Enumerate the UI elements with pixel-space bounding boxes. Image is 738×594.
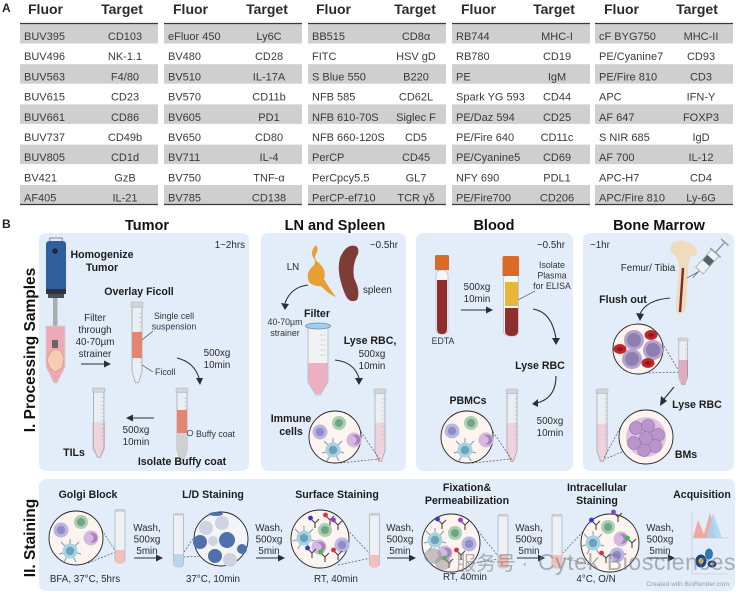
table column 4: Target	[533, 1, 575, 17]
arrow	[256, 554, 285, 562]
table column 4: RB744	[456, 31, 490, 43]
table column 3	[308, 1, 446, 204]
table column 4: CD206	[540, 192, 574, 204]
row stripes	[20, 24, 158, 204]
table column 2: BV510	[168, 71, 201, 83]
arrow: to lyse	[660, 387, 674, 406]
label: wash: 5min	[136, 546, 158, 557]
step: Golgi Block: Golgi Block	[59, 489, 118, 501]
table column 5: Target	[676, 1, 718, 17]
label: wash: Wash,	[646, 523, 674, 534]
label: wash: 500xg	[387, 534, 413, 546]
table column 3: PerCP	[312, 152, 344, 164]
row label: II. Staining: II. Staining	[22, 499, 39, 577]
table column 4: CD11c	[541, 132, 574, 144]
table column 5: APC/Fire 810	[599, 192, 665, 204]
arrow: flush	[636, 298, 670, 321]
table column 3: PerCP-ef710	[312, 192, 376, 204]
arrow: to PBMC tube	[532, 376, 556, 407]
arrow	[134, 554, 163, 562]
table column 3: NFB 660-120S	[312, 132, 385, 144]
table column 4: NFY 690	[456, 172, 499, 184]
chart: histogram	[692, 512, 728, 538]
step: Intracellular Staining	[552, 482, 639, 585]
tube: plasma separation	[502, 256, 519, 336]
label: spin: 500xg	[537, 416, 563, 427]
table column 2: BV650	[168, 132, 201, 144]
icon: homogenizer	[46, 238, 66, 383]
table column 2: IL-4	[260, 152, 278, 164]
step: L/D Staining: L/D Staining	[182, 489, 244, 501]
watermark icon	[424, 548, 451, 570]
table column 4: PE/Fire700	[456, 192, 511, 204]
table column 3: FITC	[312, 51, 336, 63]
table column 3: Siglec F	[396, 112, 436, 124]
table column 4: IgM	[548, 71, 566, 83]
step: Fixation and Permeabilization: RT, 40min	[443, 572, 487, 583]
table column 3: NFB 610-70S	[312, 112, 379, 124]
table column 5: IgD	[692, 132, 710, 144]
table column 2: CD28	[255, 51, 283, 63]
label: femur/tibia: Femur/ Tibia	[621, 263, 676, 274]
arrow: spin	[461, 306, 493, 314]
table column 5: AF 647	[599, 112, 634, 124]
label: wash: 5min	[518, 546, 540, 557]
label: PBMCs: PBMCs	[449, 395, 487, 407]
arrow	[387, 554, 416, 562]
table column 1: BUV661	[24, 112, 65, 124]
table column 5: IL-12	[688, 152, 714, 164]
step: Acquisition: Acquisition	[673, 489, 731, 501]
label: Lyse RBC: Lyse RBC	[515, 360, 565, 372]
table column 2: Target	[246, 1, 288, 17]
table column 1: CD1d	[111, 152, 139, 164]
magnified BMs	[604, 410, 673, 464]
icon: syringe	[687, 238, 730, 283]
step: Fixation and Permeabilization	[422, 482, 509, 583]
table column 4: MHC-I	[541, 31, 573, 43]
label: filter step: strainer	[79, 349, 112, 360]
magnified cells	[441, 411, 512, 463]
label: Immune cells: cells	[279, 426, 303, 438]
label: spin: 500xg	[359, 349, 385, 360]
step: Golgi Block	[49, 489, 125, 585]
label: single cell suspension: suspension	[152, 322, 196, 332]
table column 3: TCR γδ	[397, 192, 435, 204]
panel: Blood	[416, 218, 573, 471]
table column 1: IL-21	[112, 192, 138, 204]
table column 2: CD138	[252, 192, 286, 204]
tube: EDTA blood	[435, 255, 449, 334]
table column 5: CD93	[687, 51, 715, 63]
arrow: to TILs	[126, 414, 154, 422]
table column 4: RB780	[456, 51, 490, 63]
label: buffy coat: Buffy coat	[196, 429, 236, 439]
table column 1	[20, 1, 158, 204]
table column 3: Fluor	[316, 1, 352, 17]
table column 2: BV750	[168, 172, 201, 184]
label: BMs: BMs	[675, 449, 697, 461]
table column 4: Fluor	[461, 1, 497, 17]
label: wash: 5min	[258, 546, 280, 557]
label: spin 500xg: 500xg	[204, 348, 230, 359]
table column 4: Spark YG 593	[456, 92, 525, 104]
magnified marrow cells	[613, 324, 683, 376]
step: Fixation and Permeabilization: Fixation&	[443, 482, 491, 494]
tube: BMs	[596, 389, 608, 462]
tube: PBMCs	[506, 389, 518, 462]
label: isolate plasma: for ELISA	[533, 281, 571, 291]
table column 2: PD1	[258, 112, 280, 124]
step: Intracellular Staining: 4°C, O/N	[576, 574, 616, 585]
tube: ficoll overlay	[131, 302, 143, 383]
label: isolate plasma: Plasma	[537, 270, 567, 280]
table column 1: CD23	[111, 92, 139, 104]
row label: I. Processing Samples: I. Processing Samples	[22, 268, 39, 432]
label: spin: 10min	[537, 428, 563, 439]
table column 3: CD8α	[402, 31, 431, 43]
arrow	[517, 554, 545, 562]
panel: Bone Marrow	[583, 218, 734, 471]
tube: marrow	[678, 338, 688, 385]
arrow: lyse to tube	[335, 360, 363, 385]
label: filter step: Filter	[84, 313, 106, 324]
table column 3: PerCpcy5.5	[312, 172, 369, 184]
tube: immune cells	[374, 389, 386, 462]
section label A: A	[2, 1, 11, 15]
table column 5	[595, 1, 733, 204]
table column 1: CD86	[111, 112, 139, 124]
label: spleen: spleen	[363, 285, 392, 296]
table column 2: Fluor	[173, 1, 209, 17]
label: time: 1~2hrs	[215, 240, 245, 251]
table column 4: CD44	[543, 92, 571, 104]
table column 5: MHC-II	[684, 31, 718, 43]
panel: LN and Spleen	[261, 218, 406, 471]
label: Flush out: Flush out	[599, 294, 647, 306]
table column 4: PE	[456, 71, 471, 83]
label: single cell suspension: Single cell	[154, 311, 194, 321]
table column 2: CD80	[255, 132, 283, 144]
label: filter step: through	[78, 325, 112, 336]
panel: Tumor	[39, 218, 249, 471]
step: Surface Staining	[291, 489, 380, 585]
label: wash: 500xg	[516, 534, 542, 546]
table column 1: AF405	[24, 192, 56, 204]
step: Surface Staining: Surface Staining	[295, 489, 379, 501]
label: Filter: Filter	[304, 308, 330, 320]
arrow: node to filter	[281, 285, 308, 310]
table column 1: NK-1.1	[108, 51, 142, 63]
step: Golgi Block: BFA, 37°C, 5hrs	[50, 574, 120, 585]
table column 1: BUV563	[24, 71, 65, 83]
panel: LN and Spleen: LN and Spleen	[285, 218, 385, 234]
label: wash: 500xg	[647, 534, 673, 546]
table column 2: TNF-α	[253, 172, 285, 184]
label: strainer size: 40-70µm	[268, 317, 302, 327]
table column 2: CD11b	[252, 92, 286, 104]
table column 3: CD45	[402, 152, 430, 164]
label: wash: Wash,	[255, 523, 283, 534]
label: LN: LN	[287, 262, 299, 273]
table column 5: S NIR 685	[599, 132, 650, 144]
label: spin 500xg: 10min	[204, 360, 230, 371]
watermark text: Cytek Biosciences	[538, 549, 736, 575]
label: Overlay Ficoll: Overlay Ficoll	[104, 286, 174, 298]
arrow: filter to ficoll	[81, 360, 111, 368]
credit: Created with BioRender.com	[646, 581, 729, 588]
table column 2: Ly6C	[256, 31, 282, 43]
table column 3: CD62L	[399, 92, 433, 104]
label: filter step: 40-70µm	[76, 337, 114, 348]
watermark text: 服务号 ·	[456, 553, 528, 575]
table column 5: IFN-Y	[687, 92, 716, 104]
table column 2: eFluor 450	[168, 31, 221, 43]
table column 3: Target	[394, 1, 436, 17]
table column 2: IL-17A	[253, 71, 286, 83]
table column 2: BV711	[168, 152, 200, 164]
table column 4: PE/Fire 640	[456, 132, 514, 144]
tube: TILs	[92, 388, 105, 458]
table column 5: AF 700	[599, 152, 634, 164]
label: wash: Wash,	[133, 523, 161, 534]
table column 5: cF BYG750	[599, 31, 656, 43]
table column 2	[164, 1, 302, 204]
label: TILs: TILs	[63, 447, 85, 459]
step: L/D Staining: 37°C, 10min	[186, 574, 240, 585]
magnified cells	[309, 411, 380, 463]
table column 1: BUV496	[24, 51, 65, 63]
table column 2: BV570	[168, 92, 201, 104]
label: EDTA: EDTA	[432, 336, 455, 346]
table column 5: Ly-6G	[686, 192, 716, 204]
label: Immune cells: Immune	[271, 413, 311, 425]
table column 2: BV785	[168, 192, 201, 204]
step: Surface Staining: RT, 40min	[314, 574, 358, 585]
table column 3: B220	[403, 71, 429, 83]
table column 3: GL7	[406, 172, 426, 184]
table column 4: PDL1	[543, 172, 571, 184]
table column 3: NFB 585	[312, 92, 355, 104]
label: spin: 10min	[359, 361, 385, 372]
table column 3: BB515	[312, 31, 345, 43]
table column 5: PE/Fire 810	[599, 71, 657, 83]
label: wash: 5min	[649, 546, 671, 557]
panel: Bone Marrow: Bone Marrow	[613, 218, 706, 234]
label: spin: 10min	[464, 294, 490, 305]
label: time: ~0.5hr	[537, 240, 566, 251]
label: time: ~1hr	[590, 240, 611, 251]
arrow: to lyse	[533, 309, 560, 345]
step: L/D Staining	[174, 489, 248, 585]
label: Homogenize Tumor: Tumor	[86, 262, 118, 274]
label: Lyse RBC: Lyse RBC	[672, 399, 722, 411]
table column 5: APC	[599, 92, 622, 104]
icon: lymph node	[308, 245, 336, 297]
tube: filter tube	[306, 323, 330, 395]
table column 1: BUV615	[24, 92, 65, 104]
label: wash: 5min	[389, 546, 411, 557]
table column 4: CD19	[543, 51, 571, 63]
step: Acquisition	[673, 489, 731, 574]
step: Intracellular Staining: Intracellular	[567, 482, 627, 494]
panel: Staining	[39, 479, 736, 591]
table column 5: CD3	[690, 71, 712, 83]
table column 5: CD4	[690, 172, 712, 184]
table column 1: GzB	[114, 172, 136, 184]
icon: femur	[670, 240, 697, 314]
label: wash: 500xg	[134, 534, 160, 546]
label: wash: 500xg	[256, 534, 282, 546]
step: Fixation and Permeabilization: Permeabilization	[425, 495, 509, 507]
chart: density plot	[692, 538, 728, 574]
table column 5: Fluor	[604, 1, 640, 17]
icon: spleen	[339, 246, 358, 301]
table column 3: CD5	[405, 132, 427, 144]
table column 1: BUV805	[24, 152, 65, 164]
table column 1: CD103	[108, 31, 142, 43]
table column 1: F4/80	[111, 71, 139, 83]
label: Lyse RBC: Lyse RBC,	[344, 335, 396, 347]
table column 2: BV480	[168, 51, 201, 63]
table column 3: S Blue 550	[312, 71, 366, 83]
label: spin 500xg: 10min	[123, 437, 149, 448]
table column 5: FOXP3	[683, 112, 719, 124]
table column 1: CD49b	[108, 132, 142, 144]
table column 5: APC-H7	[599, 172, 639, 184]
label: strainer size: strainer	[270, 328, 300, 338]
table column 4: CD25	[543, 112, 571, 124]
table column 1: Fluor	[28, 1, 64, 17]
table column 4	[452, 1, 590, 204]
table column 4: PE/Cyanine5	[456, 152, 520, 164]
panel: Blood: Blood	[473, 218, 515, 234]
arrow	[647, 554, 675, 562]
label: Isolate Buffy coat: Isolate Buffy coat	[138, 456, 227, 468]
table column 1: BUV395	[24, 31, 65, 43]
panel: Tumor: Tumor	[125, 218, 169, 234]
table column 1: BUV737	[24, 132, 65, 144]
label: spin: 500xg	[464, 282, 490, 293]
label: wash: Wash,	[386, 523, 414, 534]
label: Ficoll: Ficoll	[155, 367, 176, 377]
table column 2: BV605	[168, 112, 201, 124]
label: wash: Wash,	[515, 523, 543, 534]
table column 1: BV421	[24, 172, 57, 184]
arrow: spin	[177, 358, 203, 385]
label: isolate plasma: Isolate	[539, 260, 565, 270]
table column 4: PE/Daz 594	[456, 112, 515, 124]
label: time: ~0.5hr	[370, 240, 399, 251]
label: spin 500xg: 500xg	[123, 425, 149, 436]
label: Homogenize Tumor: Homogenize	[71, 249, 133, 261]
table column 5: PE/Cyanine7	[599, 51, 663, 63]
step: Intracellular Staining: Staining	[576, 495, 618, 507]
table column 1: Target	[101, 1, 143, 17]
table column 4: CD69	[543, 152, 571, 164]
section label B: B	[2, 217, 11, 231]
table column 3: HSV gD	[396, 51, 436, 63]
tube: buffy coat	[176, 388, 188, 460]
